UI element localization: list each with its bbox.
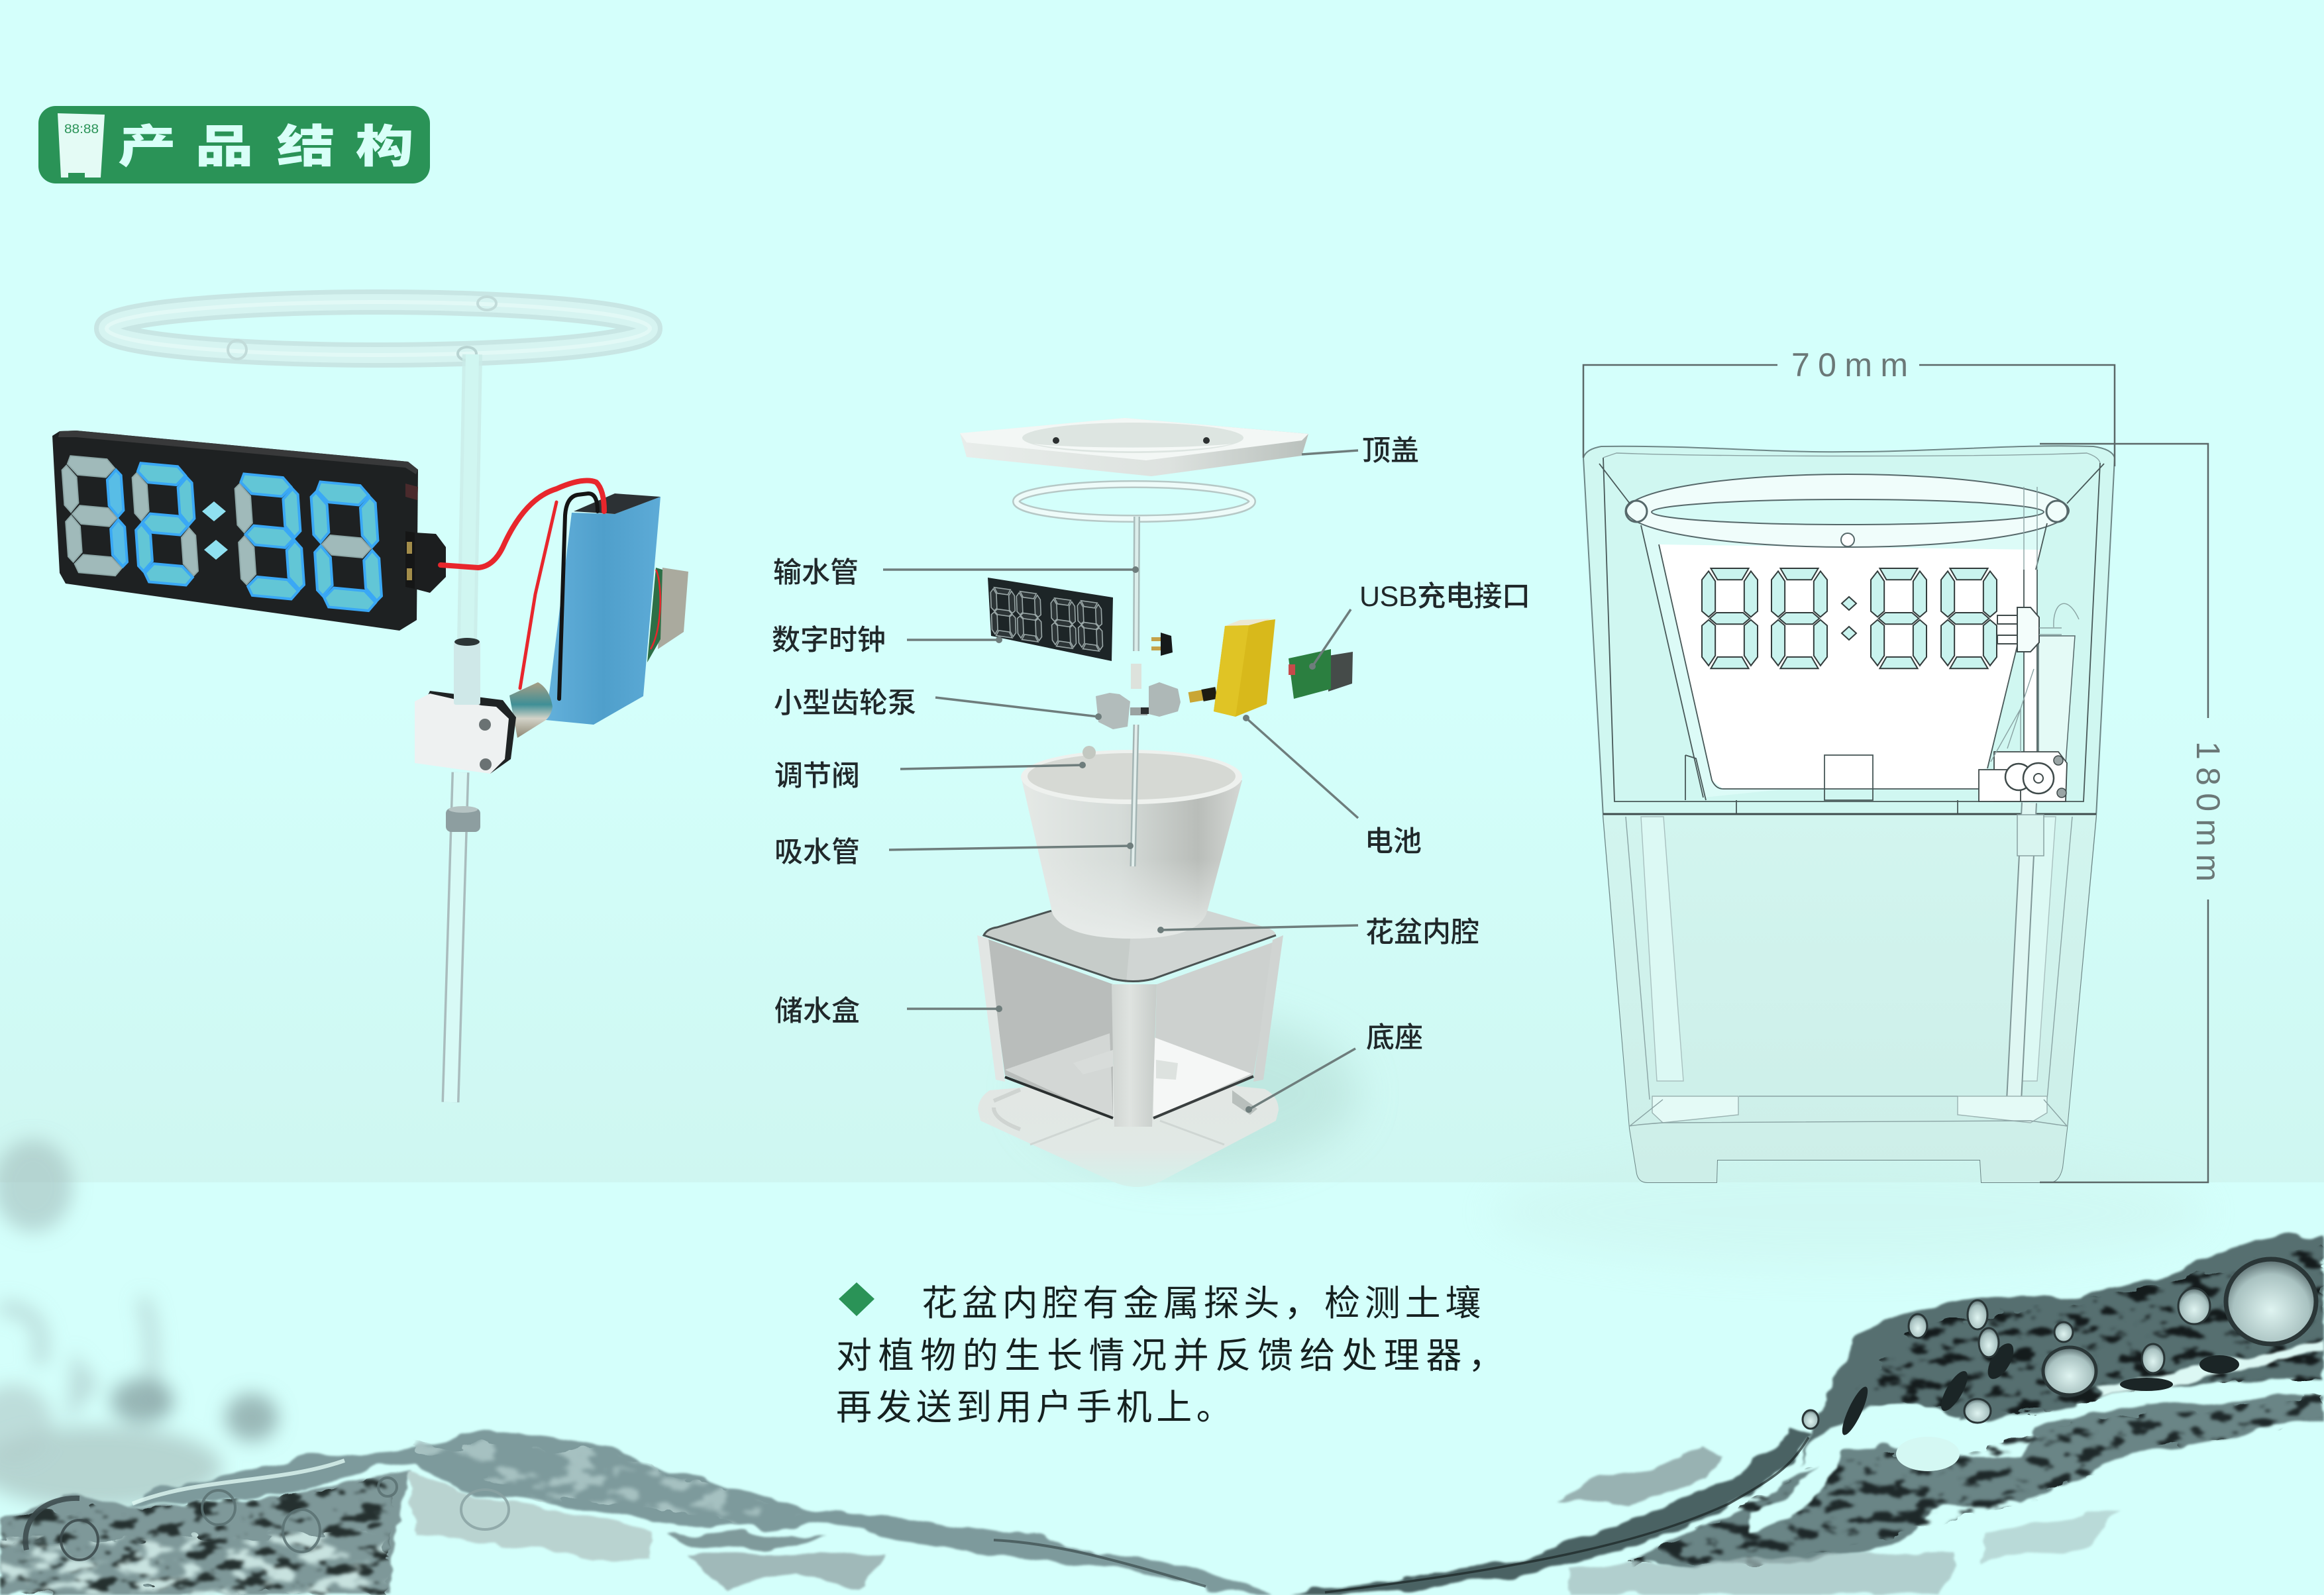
right: transparent outline drawing: [1583, 446, 2115, 1182]
internal mechanism lines: [1603, 487, 2096, 814]
digital clock panel: [52, 431, 418, 631]
digit 3: [234, 473, 305, 600]
label 小型齿轮泵: [774, 688, 1102, 720]
base tabs: [1630, 1096, 2067, 1126]
inner shell: [1603, 458, 2100, 801]
label 底座: [1245, 1022, 1423, 1113]
motor: [509, 682, 553, 738]
label 储水盒: [774, 996, 1002, 1027]
top cap: [960, 418, 1308, 476]
dimension: width 70mm: [1583, 346, 2115, 466]
upper dark mass: [1796, 1235, 2324, 1466]
label 电池: 电池: [1365, 826, 1422, 858]
pot rim and walls: [1599, 464, 2104, 798]
small digital clock: [988, 578, 1113, 661]
yellow battery: [1214, 619, 1275, 717]
outer body: [1583, 446, 2115, 1182]
description lines: 花盆内腔有金属探头，检测土壤: [922, 1284, 1485, 1323]
label 输水管: [773, 557, 1139, 589]
dimension: height 180mm: [2040, 444, 2227, 1182]
outline digits: [1702, 568, 1997, 668]
label 调节阀: 调节阀: [774, 760, 860, 792]
ring: [1016, 484, 1252, 519]
digit 2: [131, 462, 199, 586]
light strand: [1749, 1416, 1961, 1523]
water box: [977, 911, 1283, 1119]
labels: left column: [772, 557, 1139, 1027]
connector: [1151, 633, 1173, 656]
long dark strand: [1279, 1431, 1812, 1595]
label 电池: [1243, 715, 1422, 858]
wires: [441, 481, 604, 699]
description text block: 再发送到用户手机上。: [836, 1388, 1236, 1427]
pump block: [415, 691, 516, 774]
pillar: [1112, 984, 1157, 1127]
regulating valve knob: [446, 806, 480, 832]
label 顶盖: [1302, 435, 1419, 467]
pale lobe: [1558, 1449, 1724, 1503]
water splash: right: [1279, 1235, 2324, 1595]
label 输水管: 输水管: [773, 557, 859, 589]
label USB充电接口: USB充电接口: [1359, 581, 1530, 613]
label 顶盖: 顶盖: [1362, 435, 1419, 467]
dimension: height 180mm: 180mm: [2190, 741, 2227, 882]
icon: planter with clock: 88:88: [64, 123, 99, 136]
icon: planter with clock: [58, 113, 105, 178]
faint plume: [0, 1139, 278, 1508]
suction tube: [450, 772, 460, 1102]
centre: exploded view: [960, 418, 1353, 1187]
suction tube part: [1133, 725, 1136, 866]
digit 4: [310, 481, 383, 612]
heading text: 产品结构: [118, 122, 414, 172]
title badge: [38, 106, 430, 183]
description text block: [836, 1282, 1510, 1427]
label 数字时钟: [772, 625, 1002, 656]
lower mottled mass: [1629, 1394, 2324, 1564]
lens and drips: [662, 1531, 828, 1551]
label 小型齿轮泵: 小型齿轮泵: [774, 688, 916, 719]
dimension: width 70mm: 70mm: [1791, 346, 1908, 384]
sleeve on pump: [454, 638, 480, 705]
sleeve: [1131, 664, 1141, 689]
label 数字时钟: 数字时钟: [772, 625, 886, 656]
lower mottled layer: [0, 1473, 414, 1595]
label 吸水管: [774, 837, 1134, 868]
usb module: [1289, 649, 1353, 699]
water delivery tube: [1136, 517, 1137, 651]
lower body fill: [1603, 814, 2096, 1182]
label 底座: 底座: [1366, 1022, 1423, 1054]
dark blotches: [1838, 1339, 2239, 1437]
main wave band: [127, 1432, 1275, 1595]
exploded pump parts: [1096, 682, 1181, 729]
description text block: 对植物的生长情况并反馈给处理器，: [836, 1336, 1510, 1376]
label 吸水管: 吸水管: [774, 837, 860, 868]
label 花盆内腔: [1157, 917, 1479, 949]
clock connector: [405, 531, 446, 593]
label 花盆内腔: 花盆内腔: [1365, 917, 1479, 949]
base: [978, 1060, 1279, 1187]
digit 1: [61, 455, 129, 577]
left: assembled internal mechanism: [52, 297, 688, 1102]
battery: [546, 493, 660, 725]
water splash: left: [0, 1139, 1275, 1595]
ring tube: [107, 297, 650, 360]
motor pin gold: [1189, 693, 1216, 697]
lower pillars and tube: [1626, 803, 2072, 1101]
label 调节阀: [774, 760, 1086, 792]
labels: right column: [1157, 435, 1530, 1113]
label 储水盒: 储水盒: [774, 996, 860, 1027]
left bubbles: [25, 1478, 509, 1560]
colon: [202, 501, 228, 560]
label USB充电接口: [1309, 581, 1530, 670]
bullet diamond: [839, 1282, 874, 1316]
vertical water tube: [467, 354, 472, 643]
bubbles: [1803, 1259, 2316, 1429]
inner pot: [1021, 746, 1242, 939]
usb module: [647, 568, 688, 662]
